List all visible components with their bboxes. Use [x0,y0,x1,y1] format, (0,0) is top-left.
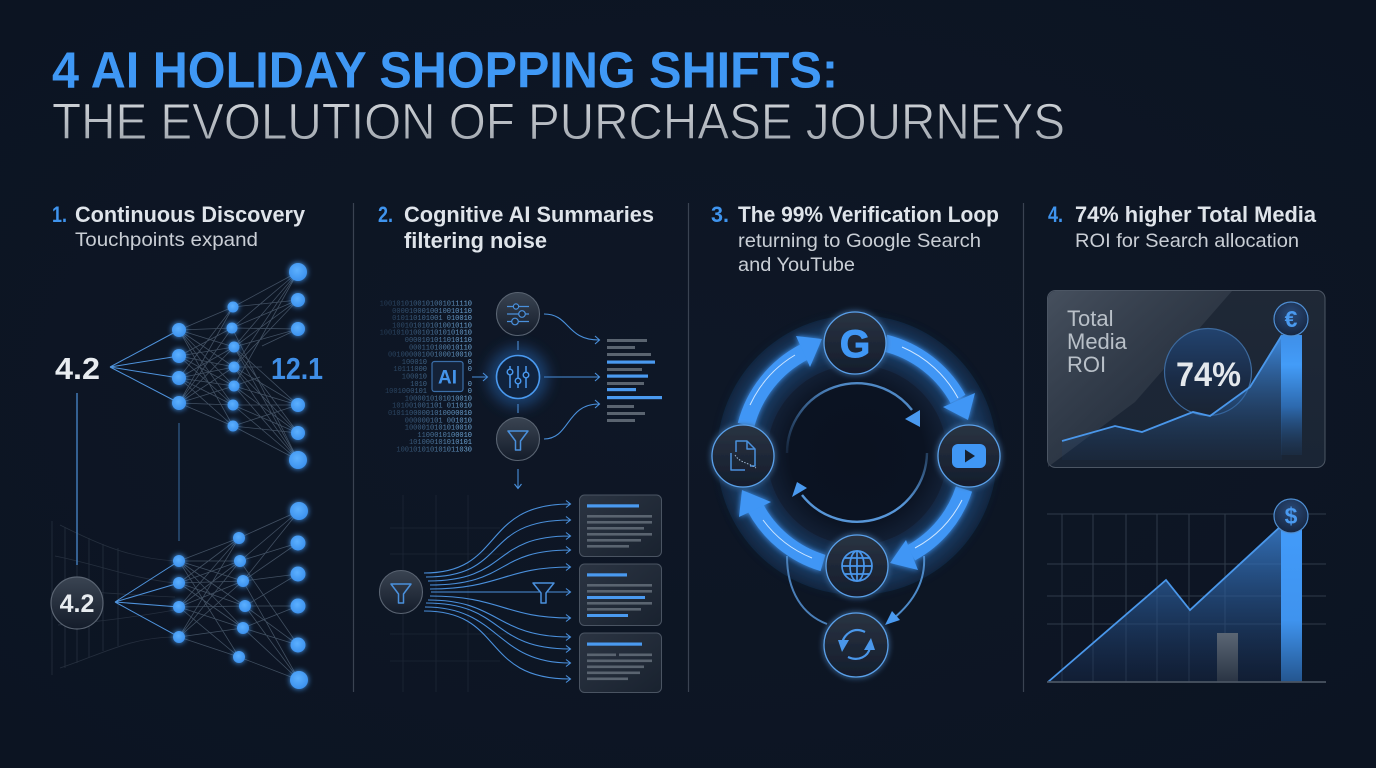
binary data stream: 100010 [402,374,427,382]
summary card 3 [580,633,662,692]
card: total media ROI chart [1048,290,1325,468]
binary data stream: 1001010100101001011110 [380,300,472,308]
heading: shift 3: 3. [711,202,729,227]
heading: shift 4 [1048,202,1317,252]
icon: globe node [826,535,888,597]
network: upper touchpoints [110,263,307,469]
faint grid backdrop [390,495,510,692]
lower loop to refresh node [787,556,924,625]
icon: highlighted sliders [488,347,548,407]
flow arrows: upper filter stage [472,314,600,488]
title [52,42,1065,150]
icon: YouTube node [938,425,1000,487]
heading: shift 1 [52,202,306,251]
icon: sliders [496,292,540,336]
euro badge: € [1285,306,1298,332]
heading: shift 2: filtering noise [404,228,547,253]
title: THE EVOLUTION OF PURCHASE JOURNEYS [52,93,1065,150]
highlighted bar [1281,335,1302,455]
heading: shift 1: Touchpoints expand [75,229,258,251]
heading: shift 4: ROI for Search allocation [1075,230,1299,252]
binary data stream: 00100000100100010010 [388,352,472,360]
value: 74%: 74% [1176,356,1241,394]
euro badge [1274,302,1308,336]
summary card 1 [580,495,662,556]
icon: funnel inline [533,583,554,603]
AI chip: AI [438,368,457,388]
badge: 4.2 [51,577,103,629]
connector line: middle column link [178,423,180,541]
binary data stream: 10111000 [393,366,427,374]
dollar badge: $ [1285,503,1298,529]
icon: funnel upper [496,418,540,460]
binary data stream: 0 [468,359,472,367]
heading: shift 3: The 99% Verification Loop [738,202,999,227]
binary data stream: 0 [468,366,472,374]
value: 4.2 start: 4.2 [55,351,100,386]
binary data stream: 01011000001010000010 [388,410,472,418]
binary data stream: 0000101011010110 [405,337,472,345]
binary data stream: 0 [468,388,472,396]
binary data stream: 100101010101011030 [396,446,472,454]
panel: verification loop [711,202,1000,677]
summary card 2 [580,564,662,626]
binary data stream: 1001010100101010101010 [380,330,472,338]
warped grid backdrop [52,521,175,675]
chart: rising area with grid [1047,499,1326,682]
binary data stream: 101000101010101 [409,439,472,447]
heading: shift 3 [711,202,999,276]
card label: Media [1067,329,1128,354]
AI chip [432,362,463,392]
binary data stream: 0 [468,381,472,389]
icon: document node [712,425,774,487]
binary data stream: 101001001101 011010 [392,403,472,411]
icon: Google node: G [840,323,870,366]
icon: funnel source [380,570,422,614]
heading: shift 3: and YouTube [738,254,855,276]
title: 4 AI HOLIDAY SHOPPING SHIFTS: [52,42,838,98]
area [1048,526,1281,682]
inner cycle arrows [787,383,927,522]
baseline [1047,681,1326,683]
card label [1067,306,1128,377]
area and line [1062,335,1282,460]
summary bars list [607,339,662,422]
binary data stream: 000000101 001010 [405,417,472,425]
heading: shift 4: 4. [1048,202,1063,227]
heading: shift 2: Cognitive AI Summaries [404,202,654,227]
value: 12.1 end: 12.1 [271,351,323,386]
panel: cognitive AI summaries [378,202,662,692]
binary data stream: 100010 [402,359,427,367]
highlighted bar [1281,528,1302,682]
dollar badge [1274,499,1308,533]
heading: shift 1: 1. [52,202,67,227]
halo ring [717,315,997,595]
binary data stream: 1100010100010 [417,432,472,440]
heading: shift 3: returning to Google Search [738,230,981,252]
network: lower touchpoints [115,502,308,689]
heading: shift 1: Continuous Discovery [75,202,306,227]
binary data stream: 1001010101010010110 [392,322,472,330]
binary data stream: 1000010101010010 [405,425,472,433]
binary data stream [380,300,472,454]
callout circle [1164,328,1252,416]
binary data stream: 1001000101 [385,388,427,396]
ring arrows [739,336,975,570]
icon: Google node [824,312,886,374]
binary data stream: 1000010101010010 [405,395,472,403]
card label: Total [1067,306,1113,331]
binary data stream: 000110100010110 [409,344,472,352]
icon: refresh node [824,613,888,677]
grey bar [1217,633,1238,682]
binary data stream: 0000100010010010110 [392,308,472,316]
card label: ROI [1067,352,1106,377]
binary data stream: 1010 [410,381,427,389]
connector lines: upper and lower vertical links [76,393,78,565]
heading: shift 2: 2. [378,202,393,227]
fan of filtered streams [424,500,570,682]
badge: 4.2: 4.2 [60,590,94,618]
heading: shift 2 [378,202,654,253]
binary data stream: 010110101001 010010 [392,315,472,323]
panel: total media ROI [1047,202,1326,682]
panel: continuous discovery [51,202,323,689]
heading: shift 4: 74% higher Total Media [1075,202,1317,227]
